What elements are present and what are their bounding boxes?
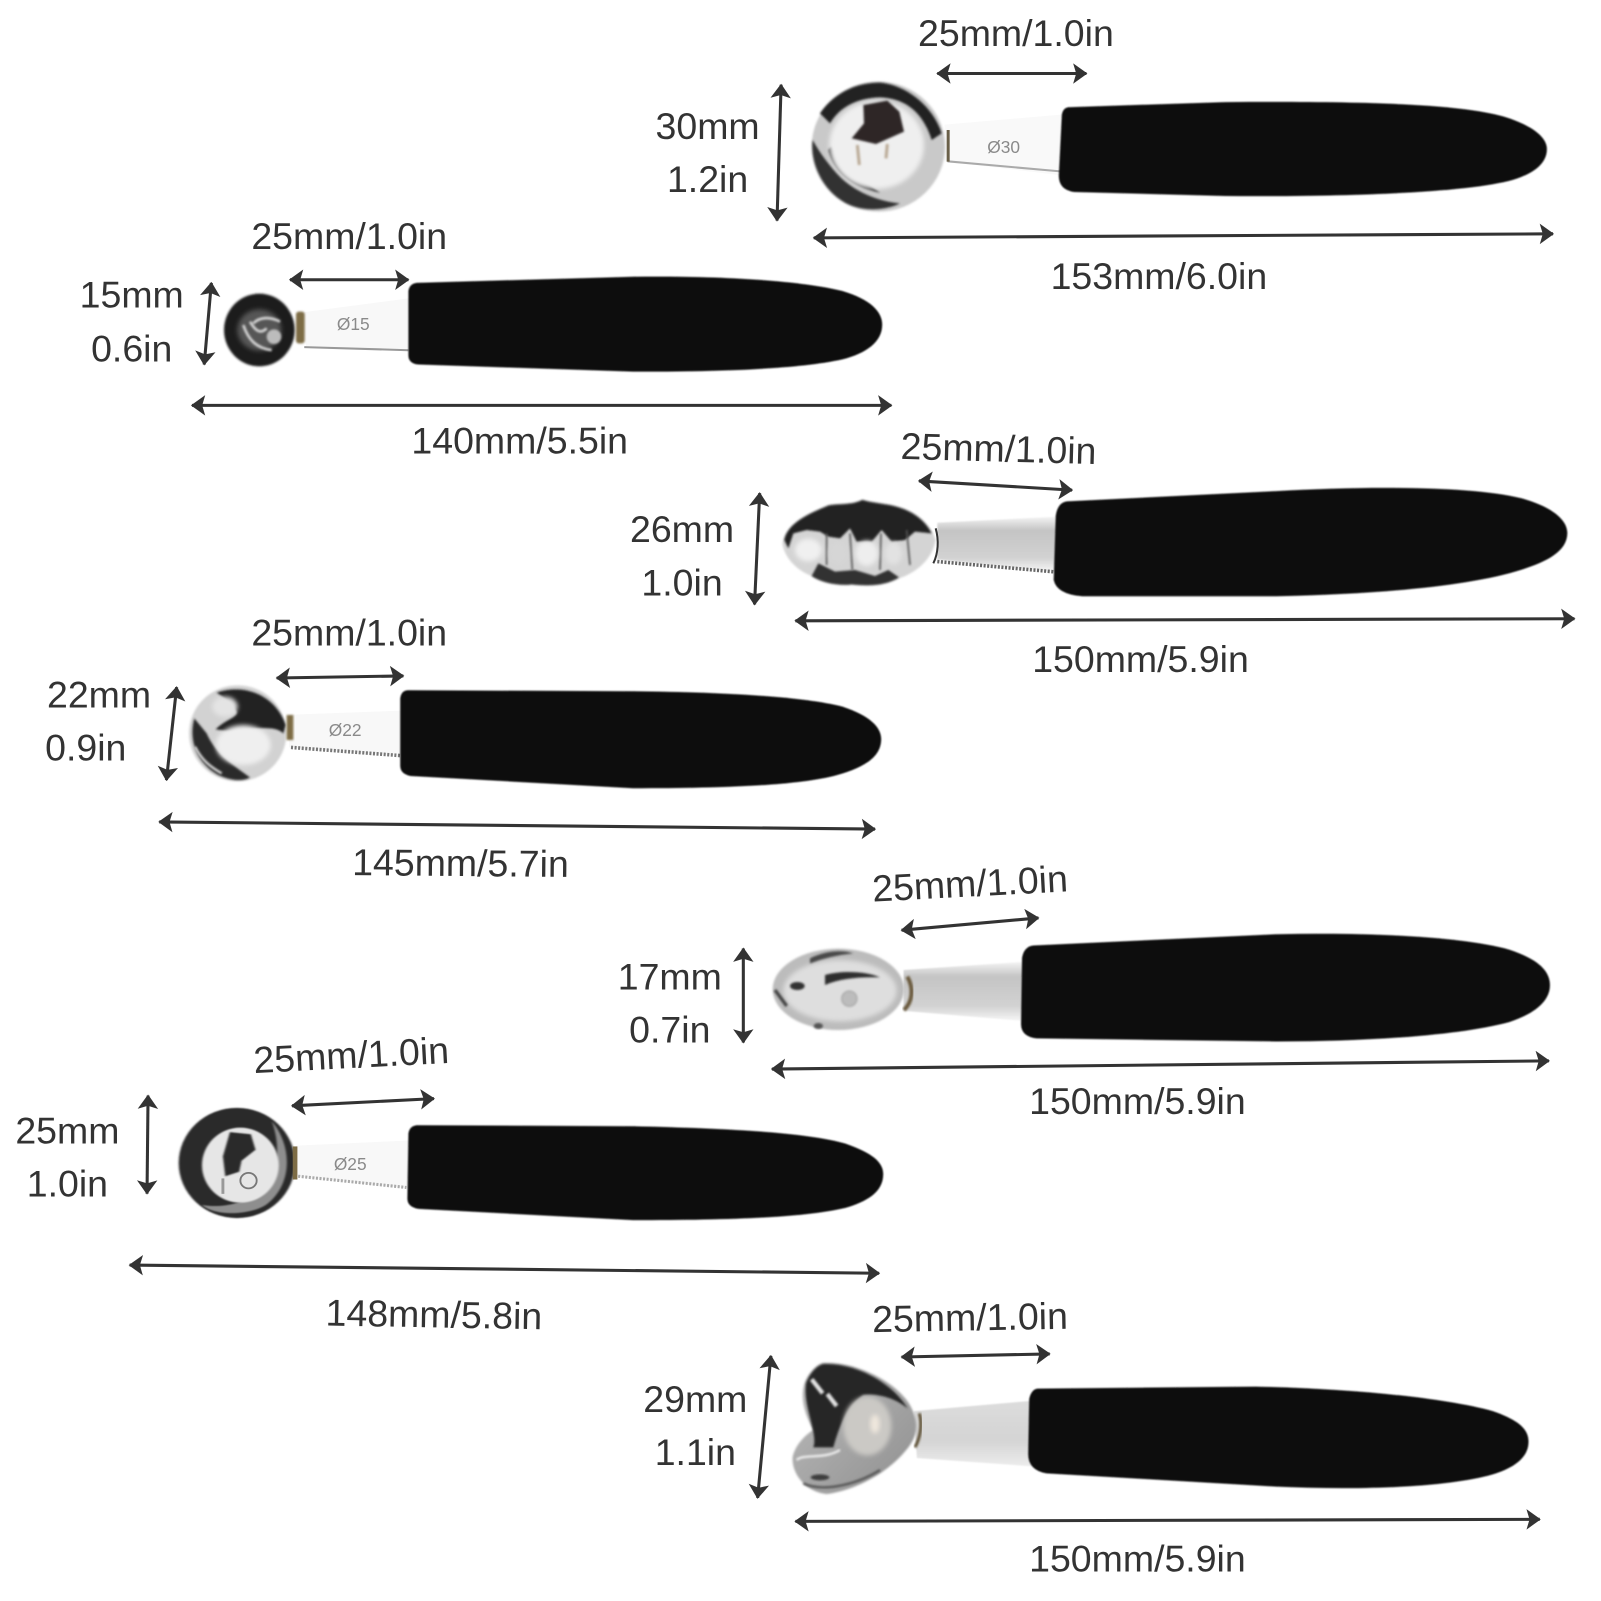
handle [1021, 934, 1550, 1041]
label: diameter mm: 29mm [643, 1378, 747, 1420]
dimension: overall length [795, 619, 1574, 621]
label: neck length: 25mm/1.0in [871, 857, 1069, 910]
dimension: neck width [290, 278, 408, 281]
stem [301, 298, 410, 350]
label: neck length: 25mm/1.0in [872, 1295, 1068, 1340]
engraved size mark: Ø15 [337, 314, 370, 334]
bowl [179, 1108, 297, 1218]
dimension: neck width [277, 676, 403, 678]
label: overall length: 153mm/6.0in [1051, 255, 1267, 297]
dimension: overall length [130, 1265, 879, 1273]
bowl [812, 82, 950, 212]
label: neck length: 25mm/1.0in [900, 425, 1097, 472]
label: overall length: 150mm/5.9in [1029, 1537, 1246, 1579]
stem [937, 517, 1058, 572]
dimension: overall length [772, 1061, 1549, 1069]
dimension: overall length [795, 1519, 1540, 1521]
label: neck length: 25mm/1.0in [918, 12, 1114, 54]
dimension: bowl diameter [204, 283, 211, 365]
spoon group: 29mm heart [643, 1295, 1540, 1579]
dimension: neck width [937, 72, 1086, 75]
bowl [782, 499, 938, 585]
dimension: bowl diameter [777, 85, 781, 221]
label: overall length: 140mm/5.5in [411, 419, 628, 461]
spoon group: 25mm round [15, 1029, 883, 1337]
dimension: bowl diameter [147, 1096, 148, 1194]
dimension: bowl diameter [742, 949, 745, 1042]
handle [1054, 488, 1567, 596]
bowl [773, 949, 912, 1030]
label: overall length: 150mm/5.9in [1032, 638, 1249, 680]
dimension: neck width [902, 1354, 1050, 1357]
stem [944, 114, 1064, 176]
dimension: bowl diameter [755, 493, 760, 604]
label: diameter in: 1.1in [655, 1431, 736, 1473]
dimension: overall length [159, 822, 875, 829]
bowl [793, 1363, 921, 1494]
label: diameter in: 1.2in [667, 158, 748, 200]
handle [408, 277, 882, 372]
handle [1028, 1387, 1529, 1488]
dimension: neck width [902, 918, 1038, 930]
dimension: neck width [919, 481, 1072, 490]
label: diameter in: 1.0in [641, 561, 723, 603]
dimension: overall length [192, 404, 891, 407]
dimension: bowl diameter [166, 687, 177, 780]
handle [1059, 102, 1547, 196]
label: diameter in: 0.7in [629, 1008, 710, 1050]
label: diameter mm: 15mm [80, 273, 184, 315]
engraved size mark: Ø30 [987, 137, 1020, 157]
label: neck length: 25mm/1.0in [251, 611, 447, 653]
handle [407, 1125, 883, 1220]
spoon group: 17mm oval [618, 857, 1550, 1122]
handle [400, 690, 881, 788]
label: diameter in: 1.0in [27, 1163, 108, 1205]
label: diameter in: 0.9in [45, 727, 126, 769]
dimension: neck width [292, 1099, 434, 1106]
label: neck length: 25mm/1.0in [252, 1029, 450, 1081]
dimension: bowl diameter [758, 1356, 771, 1498]
label: overall length: 148mm/5.8in [325, 1291, 543, 1337]
spoon group: 22mm round [45, 611, 881, 885]
spoon group: 15mm round [80, 215, 891, 461]
dimension: overall length [814, 234, 1553, 238]
spoon group: 30mm round [656, 12, 1553, 297]
label: diameter in: 0.6in [91, 327, 172, 369]
label: overall length: 150mm/5.9in [1029, 1080, 1246, 1122]
stem [914, 1401, 1031, 1466]
engraved size mark: Ø22 [329, 720, 362, 740]
stem [904, 962, 1024, 1021]
label: diameter mm: 25mm [15, 1110, 119, 1152]
spoon group: 26mm ribbed [630, 425, 1574, 680]
label: diameter mm: 30mm [656, 105, 760, 147]
stem [289, 711, 402, 756]
label: neck length: 25mm/1.0in [251, 215, 447, 257]
label: diameter mm: 17mm [618, 955, 722, 997]
engraved size mark: Ø25 [334, 1154, 367, 1174]
label: overall length: 145mm/5.7in [352, 841, 569, 885]
bowl [224, 294, 305, 366]
bowl [189, 685, 293, 781]
label: diameter mm: 22mm [47, 674, 151, 716]
stem [296, 1141, 409, 1188]
label: diameter mm: 26mm [630, 508, 734, 550]
